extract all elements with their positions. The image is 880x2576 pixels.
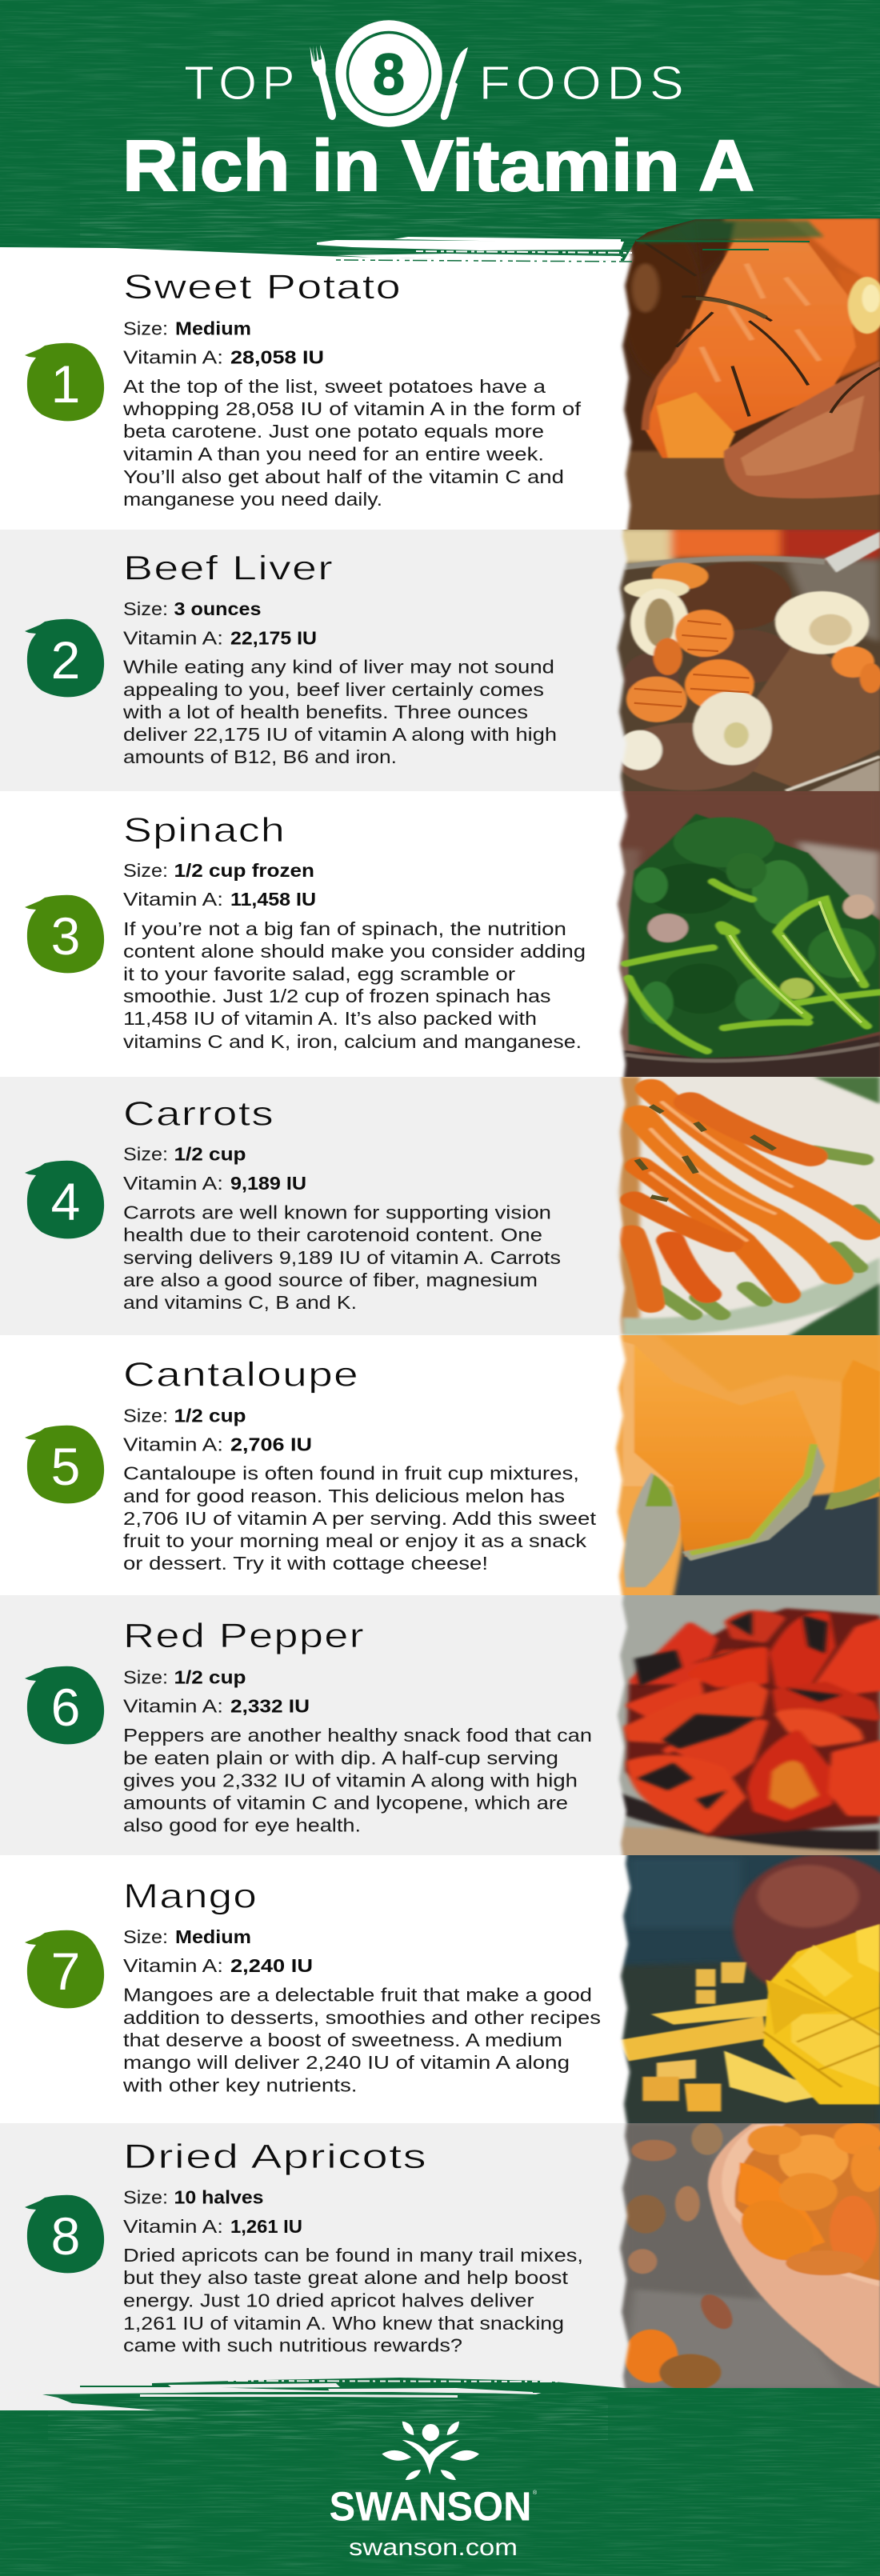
icon: swanson leaf figure	[382, 2422, 479, 2480]
number badge 6	[25, 1666, 104, 1744]
serving size: Size:	[123, 1144, 168, 1165]
row background: beef liver	[0, 530, 880, 791]
footer banner	[0, 2378, 880, 2576]
white brush streaks	[317, 237, 624, 261]
description: Mangoes are a delectable fruit that make a good	[123, 1985, 592, 2006]
vitamin a amount	[123, 1955, 313, 1976]
vitamin a amount: Vitamin A:	[123, 2216, 223, 2237]
serving size: 1/2 cup	[174, 1144, 246, 1165]
description	[122, 657, 557, 767]
serving size: Medium	[175, 1926, 251, 1947]
website url: swanson.com	[349, 2534, 518, 2561]
description: Cantaloupe is often found in fruit cup mixtures,	[123, 1463, 579, 1484]
vitamin a amount	[123, 347, 324, 368]
heading: Dried Apricots	[123, 2138, 427, 2176]
title: rich in vitamin a: Rich in Vitamin A	[122, 126, 754, 206]
serving size	[123, 1667, 246, 1688]
serving size	[123, 1144, 246, 1165]
description	[123, 918, 586, 1052]
light brush streaks	[140, 2383, 533, 2398]
serving size: Size:	[123, 318, 168, 339]
description	[123, 1725, 592, 1836]
description: amounts of B12, B6 and iron.	[123, 746, 397, 767]
text: foods: FOODS	[478, 57, 690, 110]
vitamin a amount: 22,175 IU	[230, 627, 317, 648]
description	[123, 1202, 561, 1313]
vitamin a amount: 2,240 IU	[230, 1955, 313, 1976]
serving size: Size:	[123, 1926, 168, 1947]
description: You’ll also get about half of the vitamin C and	[123, 466, 564, 487]
description	[123, 1463, 597, 1574]
description: vitamin A than you need for an entire week.	[123, 443, 544, 464]
serving size	[123, 598, 261, 619]
photo: beef liver	[614, 530, 880, 791]
vitamin a amount	[123, 627, 317, 648]
number badge 2: 2	[51, 630, 80, 690]
row background: red pepper	[0, 1595, 880, 1855]
number badge 5	[25, 1426, 104, 1503]
vitamin a amount: Vitamin A:	[123, 347, 223, 368]
logo: swanson	[330, 2422, 538, 2530]
number badge 3: 3	[51, 906, 80, 966]
vitamin a amount: Vitamin A:	[123, 1696, 223, 1717]
description: 1,261 IU of vitamin A. Who knew that snacking	[123, 2313, 564, 2334]
description: fruit to your morning meal or enjoy it as a snack	[123, 1530, 586, 1551]
serving size: 1/2 cup	[174, 1406, 246, 1426]
description: 11,458 IU of vitamin A. It’s also packed with	[123, 1008, 537, 1029]
panel: dried apricots	[25, 2138, 583, 2356]
description: vitamins C and K, iron, calcium and manganese.	[123, 1031, 582, 1052]
number badge 1	[25, 343, 104, 421]
vitamin a amount: 2,706 IU	[230, 1434, 312, 1454]
vitamin a amount	[123, 1434, 312, 1454]
vitamin a amount: 9,189 IU	[230, 1173, 306, 1194]
description: came with such nutritious rewards?	[123, 2335, 462, 2356]
vitamin a amount: 11,458 IU	[230, 889, 316, 910]
registered mark: ®	[533, 2490, 538, 2496]
description: Carrots are well known for supporting vision	[123, 1202, 551, 1222]
description	[122, 376, 582, 510]
vitamin a amount: Vitamin A:	[123, 1955, 223, 1976]
serving size: 1/2 cup	[174, 1667, 246, 1688]
serving size: Size:	[123, 860, 168, 881]
panel: mango	[25, 1878, 601, 2096]
description: it to your favorite salad, egg scramble or	[123, 964, 515, 985]
description	[123, 2245, 583, 2356]
description: that deserve a boost of sweetness. A medium	[123, 2030, 562, 2050]
description: be eaten plain or with dip. A half-cup serving	[123, 1747, 558, 1768]
serving size	[123, 1406, 246, 1426]
row background: carrots	[0, 1077, 880, 1335]
panel: spinach	[25, 811, 586, 1052]
description	[122, 1985, 601, 2096]
wordmark: SWANSON	[330, 2484, 531, 2530]
description: Peppers are another healthy snack food that can	[123, 1725, 592, 1746]
number badge 7	[25, 1930, 104, 2008]
serving size	[123, 2187, 264, 2208]
description: and for good reason. This delicious melon has	[123, 1486, 565, 1506]
vitamin a amount	[123, 2216, 302, 2237]
icon: knife	[441, 47, 468, 120]
serving size: 3 ounces	[174, 598, 261, 619]
description: 2,706 IU of vitamin A per serving. Add this sweet	[123, 1508, 597, 1529]
vitamin a amount	[123, 1696, 310, 1717]
description: mango will deliver 2,240 IU of vitamin A along	[123, 2052, 570, 2073]
description: serving delivers 9,189 IU of vitamin A. Carrots	[123, 1247, 561, 1268]
icon: plate with number 8	[335, 20, 442, 127]
serving size: 1/2 cup frozen	[174, 860, 314, 881]
panel: sweet potato	[25, 268, 582, 510]
description: addition to desserts, smoothies and other recipes	[123, 2007, 601, 2028]
heading: Beef Liver	[123, 550, 334, 588]
serving size	[123, 860, 314, 881]
vitamin a amount: Vitamin A:	[123, 889, 223, 910]
description: or dessert. Try it with cottage cheese!	[123, 1553, 488, 1574]
vitamin a amount	[123, 889, 316, 910]
green thin streaks	[636, 241, 810, 250]
panel: cantaloupe	[25, 1356, 597, 1574]
vitamin a amount	[123, 1173, 306, 1194]
green brush background	[0, 2384, 880, 2576]
description: with other key nutrients.	[122, 2075, 357, 2096]
photo: carrots	[616, 1077, 880, 1335]
description: content alone should make you consider adding	[123, 941, 586, 962]
description: smoothie. Just 1/2 cup of frozen spinach has	[123, 986, 550, 1006]
panel: beef liver	[25, 550, 557, 767]
serving size: Size:	[123, 598, 168, 619]
icon: plate with number 8: 8	[373, 43, 405, 107]
photo: mango	[618, 1855, 880, 2123]
description: If you’re not a big fan of spinach, the nutrition	[123, 918, 566, 939]
photo: dried apricots	[618, 2123, 880, 2388]
serving size: 10 halves	[174, 2187, 264, 2208]
vitamin a amount: 28,058 IU	[230, 347, 324, 368]
number badge 8	[25, 2195, 104, 2273]
serving size: Size:	[123, 1667, 168, 1688]
description: but they also taste great alone and help boost	[123, 2267, 569, 2288]
description: manganese you need daily.	[123, 489, 382, 510]
heading: Sweet Potato	[123, 268, 402, 306]
number badge 3	[25, 895, 104, 973]
number badge 4	[25, 1161, 104, 1238]
serving size: Size:	[123, 2187, 168, 2208]
row background: dried apricots	[0, 2123, 880, 2416]
panel: red pepper	[25, 1617, 592, 1836]
description: While eating any kind of liver may not sound	[123, 657, 554, 678]
description: amounts of vitamin C and lycopene, which are	[123, 1792, 568, 1813]
heading: Carrots	[123, 1094, 274, 1133]
photo: spinach	[615, 791, 880, 1077]
description: with a lot of health benefits. Three ounces	[122, 702, 528, 722]
photo: cantaloupe	[614, 1335, 880, 1595]
serving size: Size:	[123, 1406, 168, 1426]
description: also good for eye health.	[123, 1815, 361, 1836]
description: beta carotene. Just one potato equals more	[123, 421, 544, 442]
number badge 6: 6	[51, 1678, 80, 1737]
panel: carrots	[25, 1094, 561, 1313]
description: deliver 22,175 IU of vitamin A along with high	[123, 724, 557, 745]
serving size	[123, 1926, 251, 1947]
photo: red pepper	[616, 1595, 880, 1855]
vitamin a amount: 2,332 IU	[230, 1696, 310, 1717]
vitamin a amount: Vitamin A:	[123, 1434, 223, 1454]
green brush background	[0, 0, 880, 264]
text: top: TOP	[184, 57, 300, 110]
description: appealing to you, beef liver certainly comes	[123, 679, 544, 700]
number badge 8: 8	[51, 2206, 80, 2266]
description: are also a good source of fiber, magnesium	[123, 1270, 538, 1290]
description: whopping 28,058 IU of vitamin A in the form of	[122, 398, 582, 419]
number badge 5: 5	[51, 1437, 80, 1496]
heading: Spinach	[123, 811, 286, 850]
description: Dried apricots can be found in many trail mixes,	[123, 2245, 583, 2266]
vitamin a amount: 1,261 IU	[230, 2216, 302, 2237]
vitamin a amount: Vitamin A:	[123, 627, 223, 648]
upper green brush streaks	[152, 2378, 624, 2393]
header banner	[0, 0, 880, 264]
serving size: Medium	[175, 318, 251, 339]
serving size	[123, 318, 251, 339]
title line: top 8 foods	[184, 20, 690, 127]
vitamin a amount: Vitamin A:	[123, 1173, 223, 1194]
photo: sweet potato	[619, 218, 880, 530]
description: health due to their carotenoid content. One	[123, 1225, 542, 1246]
description: energy. Just 10 dried apricot halves deliver	[123, 2290, 534, 2310]
icon: fork	[310, 45, 336, 120]
description: gives you 2,332 IU of vitamin A along with high	[123, 1770, 578, 1791]
description: At the top of the list, sweet potatoes have a	[123, 376, 546, 397]
translucent brush over photo	[636, 219, 824, 243]
heading: Cantaloupe	[123, 1356, 359, 1394]
number badge 7: 7	[51, 1942, 80, 2001]
heading: Red Pepper	[123, 1617, 365, 1655]
number badge 1: 1	[51, 354, 80, 414]
number badge 2	[25, 619, 104, 697]
heading: Mango	[123, 1878, 258, 1916]
description: and vitamins C, B and K.	[123, 1292, 357, 1313]
number badge 4: 4	[51, 1172, 80, 1231]
